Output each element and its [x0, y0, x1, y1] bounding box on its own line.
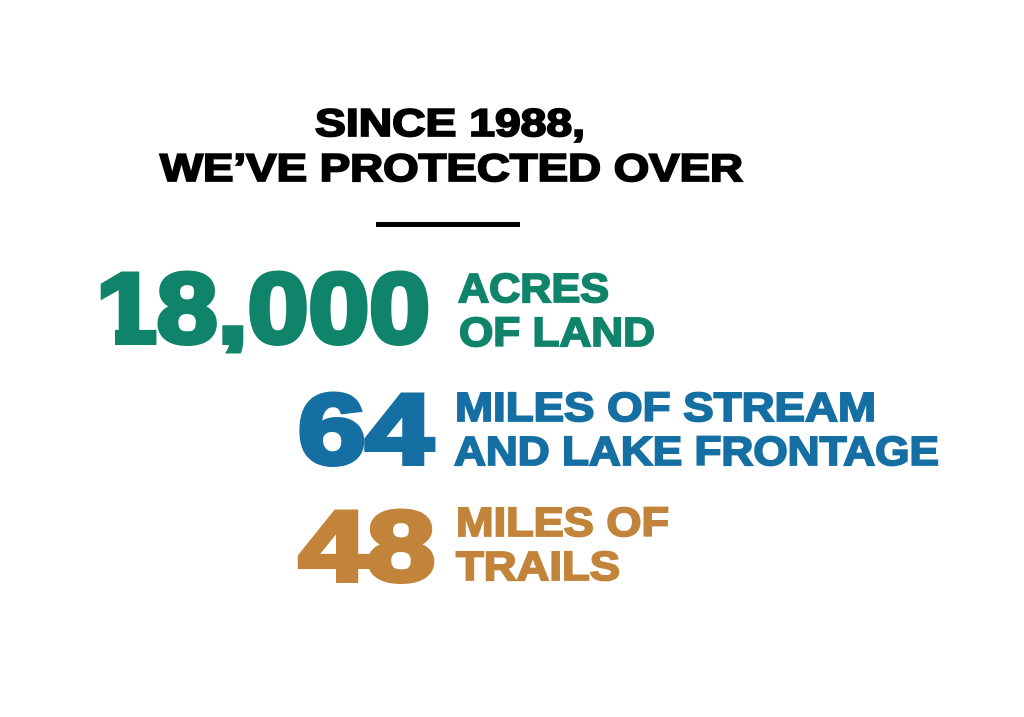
number: 48: 48 [299, 490, 435, 602]
label: acres of land: OF LAND [459, 309, 655, 355]
stat: 18,000 acres of land [96, 252, 655, 364]
label: acres of land [458, 265, 655, 355]
title: WE’VE PROTECTED OVER [160, 147, 743, 190]
stat: 64 miles of stream and lake frontage [298, 374, 939, 484]
label: miles of trails [456, 499, 669, 589]
stat: 48 miles of trails [299, 490, 669, 602]
title [160, 102, 743, 190]
label: miles of stream and lake frontage: MILES OF STREAM [455, 384, 876, 430]
title: SINCE 1988, [315, 102, 585, 145]
label: miles of trails: MILES OF [456, 499, 669, 545]
number: 64: 64 [298, 374, 433, 484]
label: acres of land: ACRES [458, 265, 609, 311]
number: 18,000: 18,000 [96, 252, 430, 364]
label: miles of stream and lake frontage: AND LAKE FRONTAGE [454, 428, 939, 474]
label: miles of stream and lake frontage [454, 384, 939, 474]
label: miles of trails: TRAILS [456, 543, 620, 589]
divider line [376, 222, 520, 227]
